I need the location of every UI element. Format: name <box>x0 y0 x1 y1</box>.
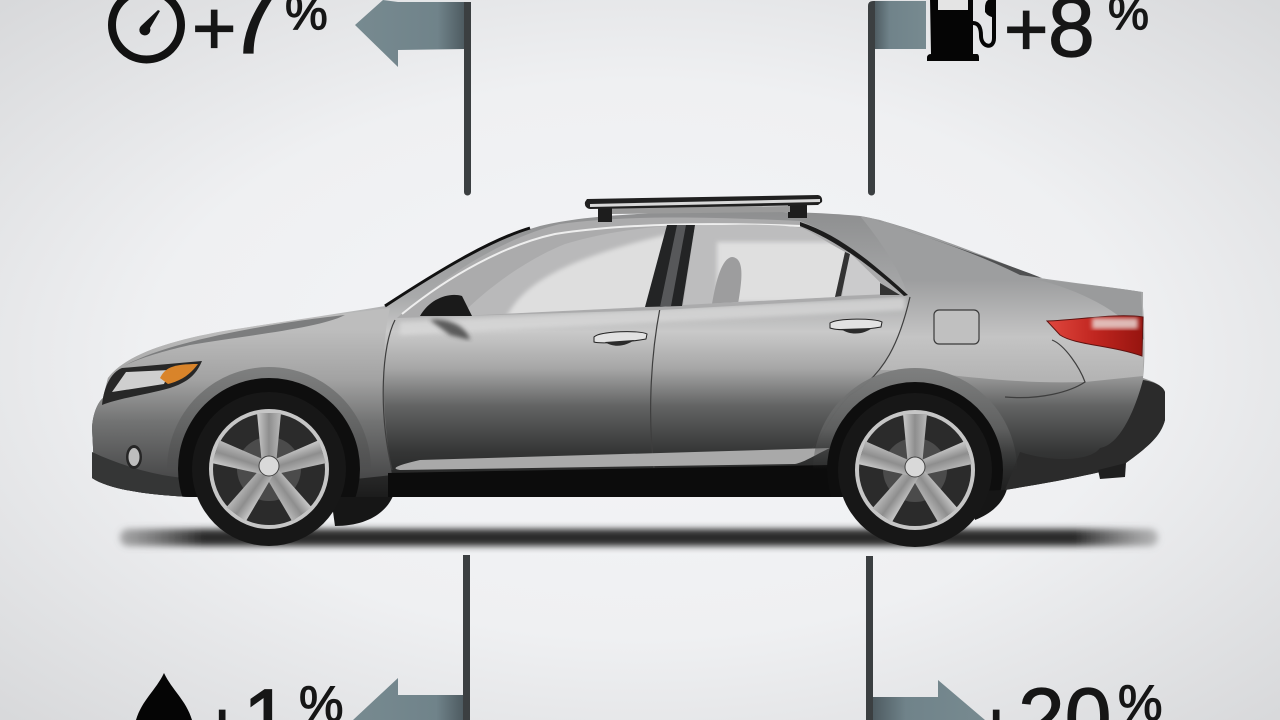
rear quarter window <box>842 252 890 296</box>
rear glass edge <box>870 218 1042 278</box>
fog lamp <box>126 445 142 469</box>
value: +1% <box>200 672 343 720</box>
callout: bottom left oil +1% <box>136 555 470 720</box>
front fender and bumper <box>92 308 392 497</box>
hood crease <box>124 315 345 366</box>
rear side window <box>683 225 847 305</box>
callout: top right fuel +8% <box>868 0 1149 196</box>
inner far-side tyres <box>330 485 1008 526</box>
rear bumper <box>1005 380 1165 490</box>
trunk edge <box>1035 279 1144 340</box>
front door handle <box>594 332 647 346</box>
fuel door <box>934 310 979 344</box>
rocker highlight <box>396 448 830 470</box>
rear door handle <box>830 319 882 334</box>
car <box>92 195 1165 572</box>
value: +7% <box>192 0 328 75</box>
rear quarter panel <box>860 216 1143 382</box>
icon: oil drop <box>136 673 192 720</box>
car body <box>92 212 1165 497</box>
front wheel <box>192 392 346 546</box>
front side window <box>468 226 666 316</box>
roof rack <box>585 195 822 222</box>
value: +20% <box>974 671 1162 720</box>
belt line highlight <box>400 297 905 335</box>
headlight <box>102 361 202 405</box>
rear wheel <box>838 393 992 547</box>
wheel arches <box>170 367 1015 497</box>
arrow flag pointing right <box>868 1 926 196</box>
side mirror <box>420 295 472 340</box>
tail light <box>1047 316 1143 356</box>
icon: speedometer gauge <box>112 0 181 60</box>
icon: fuel pump <box>927 0 996 61</box>
roof line strokes <box>385 224 800 314</box>
arrow flag pointing left <box>353 555 470 720</box>
door pillar <box>645 225 695 307</box>
exhaust <box>1098 463 1126 479</box>
arrow flag pointing left <box>355 0 471 196</box>
callout: bottom right +20% <box>866 556 1162 720</box>
front bumper lower lip <box>92 452 190 497</box>
value: +8% <box>1004 0 1149 74</box>
door panel lines <box>383 297 1085 470</box>
window surround <box>397 218 911 318</box>
black sill <box>388 465 842 497</box>
arrow flag pointing right <box>866 556 985 720</box>
ground shadow <box>120 529 1158 546</box>
callout: top left speed +7% <box>112 0 471 196</box>
